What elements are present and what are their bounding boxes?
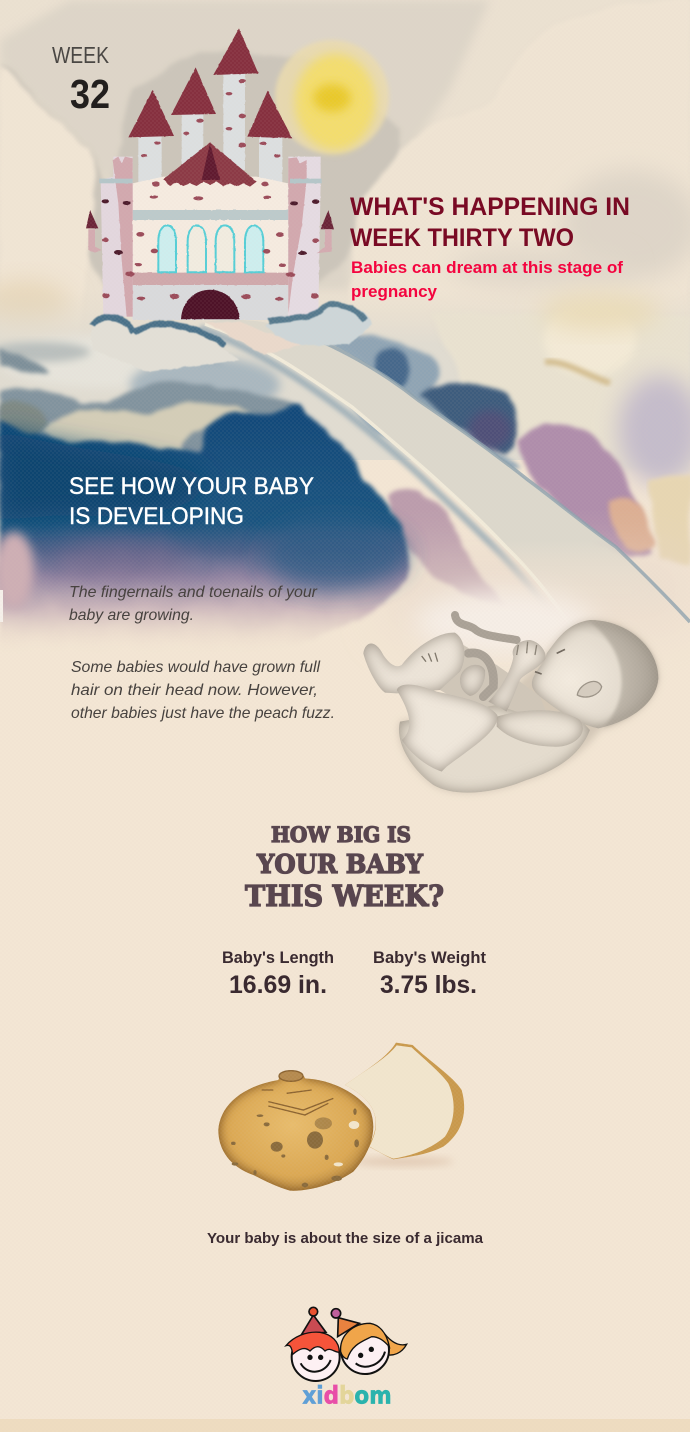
baby upper leg and foot <box>363 633 464 693</box>
heading: see how your baby <box>69 473 314 530</box>
sky clouds <box>0 0 690 340</box>
cut jicama half <box>345 1043 464 1159</box>
week label: WEEK <box>52 42 110 68</box>
baby ear <box>577 681 602 697</box>
left hair <box>286 1332 339 1354</box>
whole jicama <box>218 1071 373 1191</box>
text block: hair <box>71 659 335 722</box>
baby face details <box>535 649 565 674</box>
stat: baby's length: Baby's Length <box>222 948 334 967</box>
purple and orange washes <box>388 425 690 630</box>
glow behind baby <box>415 590 595 654</box>
baby lower hand <box>460 665 485 696</box>
size caption: Your baby is about the size of a jicama <box>207 1230 484 1247</box>
baby arm and hand <box>488 640 546 712</box>
baby illustration <box>363 615 658 793</box>
lower clouds <box>0 290 690 485</box>
logo <box>286 1307 407 1409</box>
text block: hair: other babies just have the peach fuzz. <box>71 705 335 722</box>
heading: how big <box>245 822 444 913</box>
shadow <box>353 1157 453 1166</box>
backing between limbs <box>440 645 547 723</box>
baby hair shading <box>590 622 658 727</box>
stat: baby's weight: Baby's Weight <box>373 948 486 967</box>
jicama spots <box>231 1108 359 1187</box>
baby shoulder <box>497 710 583 747</box>
castle roofs <box>86 28 334 229</box>
right face <box>341 1326 389 1374</box>
text block: fingernails: The fingernails and toenails of your <box>69 584 318 601</box>
stat: baby's weight <box>373 948 486 999</box>
stat: baby's weight: 3.75 lbs. <box>380 971 477 999</box>
heading: how big: HOW BIG IS <box>271 822 411 847</box>
ponytail <box>382 1330 407 1355</box>
deep blue cloud band <box>0 405 410 650</box>
logo bottom band <box>0 1419 690 1432</box>
heading: what's happening <box>350 193 630 252</box>
heading: how big: YOUR BABY <box>256 850 423 880</box>
text block: fingernails: baby are growing. <box>69 607 194 624</box>
castle <box>86 28 334 320</box>
slide path <box>200 320 690 632</box>
heading: how big: THIS WEEK? <box>245 879 444 913</box>
castle windows <box>158 225 263 272</box>
castle side towers <box>99 157 322 317</box>
left eyes and smile <box>301 1355 331 1372</box>
castle door <box>181 290 240 319</box>
baby drop shadow <box>399 620 658 793</box>
heading: what's happening: WEEK THIRTY TWO <box>350 224 574 252</box>
subheading: babies can dream: Babies can dream at this stage of <box>351 258 623 277</box>
sun <box>275 40 389 154</box>
baby lower leg <box>397 685 498 772</box>
left party hat <box>302 1307 326 1334</box>
week label <box>52 42 110 117</box>
stat: baby's length <box>222 948 334 999</box>
heading: what's happening: WHAT'S HAPPENING IN <box>350 193 630 221</box>
right hair <box>341 1323 389 1359</box>
right party hat <box>331 1309 359 1337</box>
stat: baby's length: 16.69 in. <box>229 971 327 999</box>
text block: hair: Some babies would have grown full <box>71 659 320 676</box>
baby head <box>532 620 658 728</box>
castle towers <box>138 73 282 185</box>
baby back and torso <box>399 705 590 793</box>
logo wordmark: xidbom <box>302 1381 392 1409</box>
left face <box>292 1333 340 1381</box>
text block: fingernails <box>69 584 318 624</box>
heading: see how your baby: SEE HOW YOUR BABY <box>69 473 314 500</box>
castle main wall <box>132 177 288 320</box>
castle side turrets <box>88 229 332 253</box>
subheading: babies can dream: pregnancy <box>351 282 438 301</box>
text block: hair: hair on their head now. However, <box>71 682 318 699</box>
heading: see how your baby: IS DEVELOPING <box>69 503 244 530</box>
umbilical cord <box>455 615 517 697</box>
subheading: babies can dream <box>351 258 623 301</box>
clouds at castle base <box>92 304 372 372</box>
jicama stem and creases <box>262 1071 333 1115</box>
jicama illustration <box>218 1043 464 1191</box>
week label: 32 <box>70 71 110 117</box>
castle brick marks <box>102 79 319 301</box>
right eyes and smile <box>356 1347 385 1367</box>
